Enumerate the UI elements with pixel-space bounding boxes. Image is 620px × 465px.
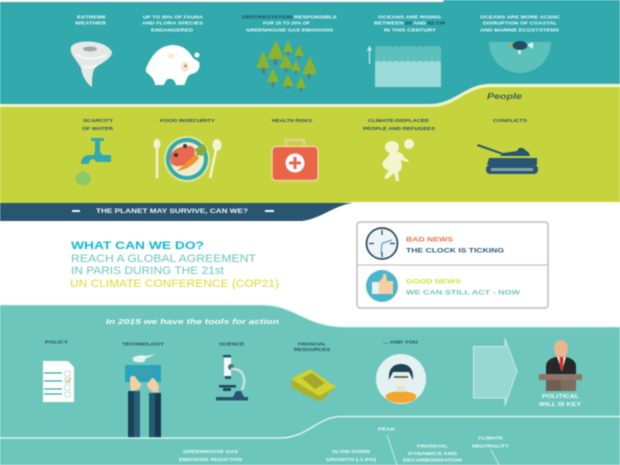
heading: oceans rising: IN THIS CENTURY	[384, 28, 436, 32]
text block: what can we do: WHAT CAN WE DO?	[71, 240, 204, 252]
label: political will: POLITICAL	[542, 394, 580, 400]
label: political will: WILL IS KEY	[539, 402, 581, 408]
heading: scarcity of water: OF WATER	[82, 126, 114, 131]
label: peak: PEAK	[378, 426, 396, 432]
text block: what can we do	[70, 240, 279, 290]
icon: thumbs up	[366, 270, 398, 302]
icon: plate of food	[154, 136, 222, 182]
heading: fauna and flora	[142, 14, 204, 32]
heading: scarcity of water	[82, 118, 114, 131]
icon: water tap	[75, 138, 111, 186]
heading: deforestation: FOR 15 TO 20% OF	[263, 20, 310, 26]
heading: food insecurity: FOOD INSECURITY	[160, 118, 215, 123]
text: good news	[406, 278, 521, 296]
label: climate neutrality: NEUTRALITY	[472, 444, 509, 448]
text: good news: WE CAN STILL ACT - NOW	[406, 290, 521, 296]
icon: politician	[539, 340, 582, 391]
heading: displaced people: CLIMATE-DISPLACED	[368, 118, 430, 123]
label: slow down growth: SLOW DOWN	[332, 449, 371, 454]
label: financial resources: RESOURCES	[294, 347, 330, 352]
panel: planet	[0, 0, 620, 106]
heading: oceans rising: OCEANS ARE RISING	[378, 14, 442, 20]
panel: tools for action	[0, 305, 620, 465]
label: emissions reduction: EMISSIONS REDUCTION	[179, 457, 243, 462]
heading: fauna and flora: AND FLORA SPECIES	[142, 20, 203, 26]
icon: technology hands	[125, 354, 161, 438]
heading: fauna and flora: UP TO 30% OF FAUNA	[143, 14, 204, 20]
icon: person circle	[376, 354, 426, 404]
label: financial resources: FINANCIAL	[298, 342, 326, 346]
label: dynamics	[403, 444, 463, 462]
divider: bottom section	[0, 416, 620, 438]
heading: deforestation: DEFORESTATION RESPONSIBLE	[242, 14, 337, 20]
text: good news: GOOD NEWS	[406, 278, 462, 286]
icon: forest	[256, 40, 317, 92]
panel: news box	[357, 222, 548, 308]
heading: extreme weather: EXTREME	[77, 14, 106, 20]
text block: what can we do: IN PARIS DURING THE 21st	[71, 265, 224, 277]
pointer: peak	[387, 435, 397, 465]
icon: polar bear	[146, 45, 200, 85]
icon: rising water	[368, 46, 441, 87]
pointer: neutrality	[491, 450, 499, 465]
heading: scarcity of water: SCARCITY	[83, 118, 113, 123]
heading: conflicts: CONFLICTS	[493, 118, 527, 123]
heading: oceans acidic: AND MARINE ECOSYSTEMS	[480, 28, 559, 32]
panel: people	[0, 87, 620, 203]
arrow: to political will	[474, 338, 517, 406]
label: technology: TECHNOLOGY	[122, 342, 164, 346]
icon: clock	[366, 228, 398, 259]
text block: what can we do: REACH A GLOBAL AGREEMENT	[71, 253, 256, 265]
label: and you: ... AND YOU	[383, 340, 419, 344]
label: climate neutrality: CLIMATE	[478, 436, 503, 440]
icon: policy document	[43, 361, 74, 402]
text: bad news: BAD NEWS	[406, 236, 454, 244]
heading: displaced people: PEOPLE AND REFUGEES	[363, 126, 435, 131]
label: dynamics: DECARBONISATION	[403, 458, 463, 462]
heading: extreme weather	[75, 14, 107, 26]
label: slow down growth	[326, 449, 377, 462]
icon: microscope	[216, 355, 248, 400]
heading: deforestation: GREENHOUSE GAS EMISSIONS	[246, 28, 333, 32]
label: emissions reduction	[179, 449, 243, 462]
label: slow down growth: GROWTH (-1.5%)	[326, 457, 377, 462]
banner: the planet may survive	[0, 203, 353, 221]
heading: displaced people	[363, 118, 435, 131]
heading: deforestation	[242, 14, 337, 32]
heading: oceans acidic	[480, 14, 561, 32]
label: dynamics: DYNAMICS AND	[408, 451, 458, 456]
heading: fauna and flora: ENDANGERED	[151, 28, 194, 32]
label: dynamics: FINANCIAL	[417, 444, 448, 448]
heading: oceans acidic: DISRUPTION OF COASTAL	[483, 20, 557, 26]
label: science: SCIENCE	[219, 342, 244, 346]
icon: acid sea with fish	[489, 41, 551, 73]
heading: people: People	[487, 92, 523, 101]
banner: the planet may survive: THE PLANET MAY SURVIVE, CAN WE?	[96, 208, 248, 215]
label: policy: POLICY	[45, 340, 68, 344]
icon: money stack	[291, 369, 336, 402]
text block: what can we do: UN CLIMATE CONFERENCE (COP21)	[70, 278, 279, 290]
icon: tank	[477, 144, 538, 174]
heading: health risks: HEALTH RISKS	[272, 118, 312, 123]
text: bad news: THE CLOCK IS TICKING	[406, 248, 504, 254]
text: bad news	[406, 236, 504, 254]
icon: first aid kit	[272, 140, 318, 180]
label: emissions reduction: GREENHOUSE GAS	[183, 449, 238, 454]
heading: tools for action: In 2015 we have the tools for action	[106, 317, 280, 326]
icon: refugee	[382, 139, 414, 181]
heading: oceans rising	[374, 14, 445, 32]
heading: extreme weather: WEATHER	[75, 20, 107, 26]
label: climate neutrality	[472, 436, 509, 448]
heading: oceans rising: BETWEEN 26 AND 82 CM	[374, 20, 445, 26]
label: political will	[539, 394, 581, 408]
heading: oceans acidic: OCEANS ARE MORE ACIDIC	[480, 14, 561, 20]
label: financial resources	[294, 342, 330, 352]
icon: tornado	[71, 42, 112, 87]
